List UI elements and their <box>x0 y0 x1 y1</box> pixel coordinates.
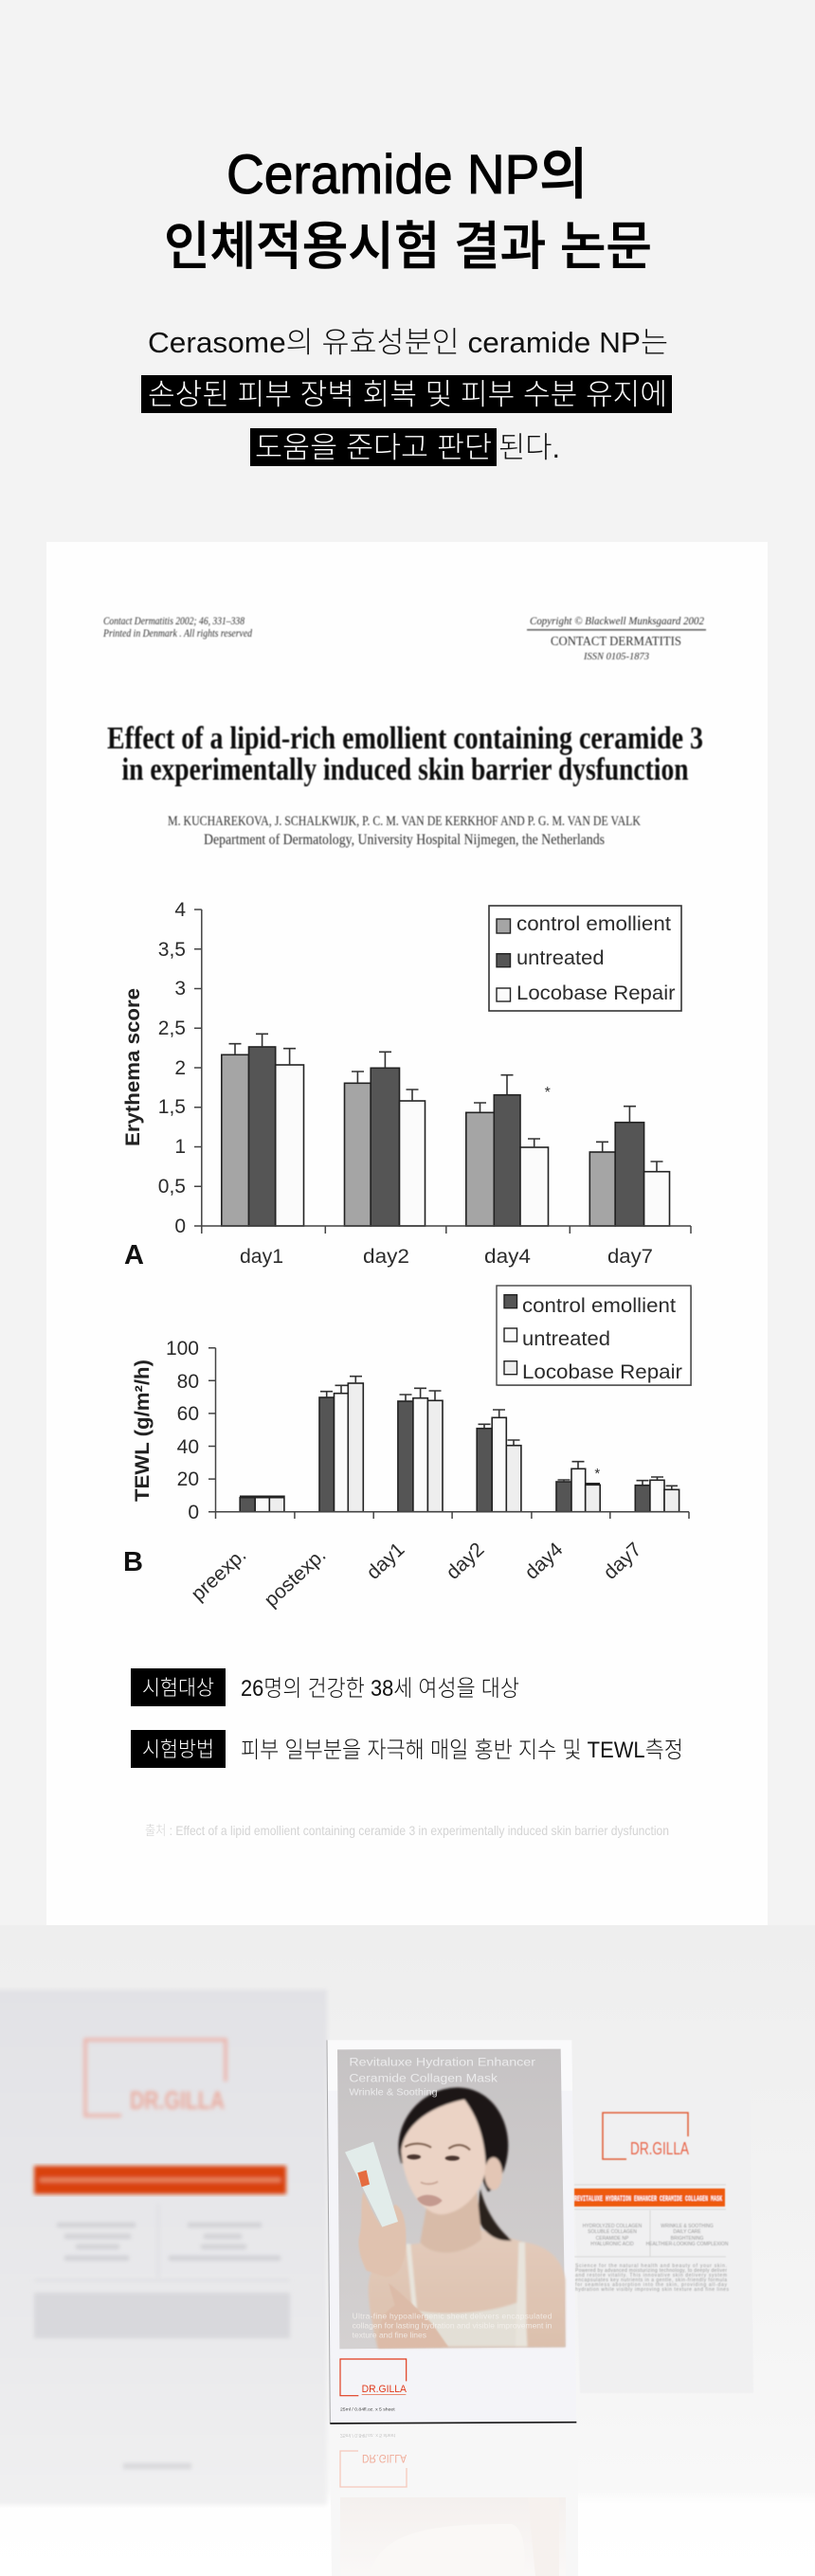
bars group day7 <box>635 1477 679 1512</box>
pack ingredients: HYALURONIC ACID <box>590 2242 634 2247</box>
bars group postexp <box>319 1377 363 1512</box>
neck <box>420 2191 481 2253</box>
bars group day2 <box>477 1410 521 1512</box>
significance star: * <box>594 1466 600 1482</box>
x axis labels: day4 <box>484 1246 531 1268</box>
blurred foreground pack <box>0 1990 327 2505</box>
x axis labels: day2 <box>363 1246 409 1268</box>
panel letter B: B <box>123 1547 143 1577</box>
pack ingredients: BRIGHTENING <box>671 2236 703 2242</box>
reflected logo <box>340 2451 407 2487</box>
study subject row: 26명의 건강한 38세 여성을 대상 <box>241 1676 519 1702</box>
pack ingredients <box>574 2185 729 2257</box>
y axis labels: 1,5 <box>158 1096 186 1118</box>
photo caption: collagen for lasting hydration and visible improvement in <box>353 2320 552 2330</box>
rotated x axis labels: preexp. <box>187 1544 250 1605</box>
y axis labels: 2 <box>174 1057 186 1079</box>
y axis labels: 80 <box>177 1371 199 1393</box>
pack ingredients: SOLUBLE COLLAGEN <box>588 2229 637 2235</box>
y axis labels: 3,5 <box>158 939 186 961</box>
box logo <box>340 2359 407 2396</box>
model photo <box>337 2049 566 2349</box>
paper header <box>102 614 706 662</box>
study method row <box>131 1730 683 1768</box>
bar chart A: erythema score <box>122 899 691 1270</box>
axes <box>208 1348 689 1519</box>
raised hand <box>358 2191 406 2277</box>
y axis labels: 60 <box>177 1403 199 1425</box>
x axis labels <box>240 1246 653 1268</box>
significance star: * <box>545 1085 551 1101</box>
paper header: Contact Dermatitis 2002; 46, 331–338 <box>103 614 244 627</box>
bars group day7 <box>589 1107 669 1226</box>
bars group preexp <box>240 1496 284 1512</box>
rotated x axis labels: day2 <box>442 1539 488 1584</box>
y axis labels: 100 <box>166 1338 199 1360</box>
box logo: DR.GILLA <box>362 2384 407 2395</box>
ponytail <box>477 2189 512 2241</box>
box reflection <box>330 2426 578 2576</box>
blurred orange band <box>34 2166 286 2194</box>
nose <box>421 2182 438 2184</box>
x axis labels: day7 <box>607 1246 653 1268</box>
intro paragraph: 도움을 준다고 판단 <box>255 431 492 464</box>
study method row: 피부 일부분을 자극해 매일 홍반 지수 및 TEWL측정 <box>241 1738 683 1763</box>
source note: 출처 : Effect of a lipid emollient containing ceramide 3 in experimentally induced skin barrier dysfunction <box>145 1823 669 1838</box>
photo caption <box>353 2311 552 2339</box>
paper title: Effect of a lipid-rich emollient containing ceramide 3 <box>107 721 703 756</box>
y axis labels: 2,5 <box>158 1018 186 1039</box>
photo headline: Wrinkle & Soothing <box>349 2088 438 2099</box>
pack description: and restore vitality. This innovative skin delivery system <box>575 2273 727 2279</box>
product photo background <box>0 1925 815 2576</box>
face <box>401 2099 486 2214</box>
orange product band <box>574 2189 725 2207</box>
y axis labels <box>158 899 186 1237</box>
pack ingredients: DAILY CARE <box>673 2229 701 2235</box>
bars group day1 <box>222 1034 303 1226</box>
pack description: Science for the natural health and beauty of your skin. <box>575 2263 727 2269</box>
page background <box>0 0 815 1925</box>
y axis labels: 4 <box>174 899 186 921</box>
rotated x axis labels: day4 <box>520 1539 568 1584</box>
legend A: untreated <box>516 947 605 969</box>
rotated x axis labels: day7 <box>599 1539 645 1584</box>
paper header: ISSN 0105-1873 <box>583 651 649 662</box>
rotated x axis labels: postexp. <box>261 1544 330 1612</box>
bars group day2 <box>345 1052 425 1226</box>
paper authors <box>168 814 641 848</box>
title <box>164 144 652 276</box>
y axis labels: 1 <box>174 1136 186 1158</box>
title: Ceramide NP의 <box>226 144 588 206</box>
pack description <box>575 2263 730 2293</box>
pack ingredients: WRINKLE & SOOTHING <box>661 2224 714 2229</box>
photo headline <box>349 2056 535 2099</box>
pack logo: DR.GILLA <box>630 2139 689 2158</box>
pack description: hydration while visibly improving skin texture and fine lines <box>575 2287 730 2293</box>
pack description: encapsulates key nutrients in a gentle, skin-friendly formula <box>575 2278 727 2283</box>
x axis labels: day1 <box>240 1246 283 1268</box>
intro paragraph: 된다. <box>498 431 560 464</box>
reflected photo <box>340 2497 566 2576</box>
hair <box>399 2087 508 2191</box>
paper header: CONTACT DERMATITIS <box>551 635 681 649</box>
pack logo <box>603 2113 689 2159</box>
y axis labels: 20 <box>177 1468 199 1490</box>
legend B: Locobase Repair <box>522 1361 682 1383</box>
blurred pack logo: DR.GILLA <box>130 2086 225 2115</box>
paper authors: M. KUCHAREKOVA, J. SCHALKWIJK, P. C. M. VAN DE KERKHOF AND P. G. M. VAN DE VALK <box>168 814 641 829</box>
axes <box>194 910 691 1234</box>
intro paragraph <box>141 326 672 466</box>
panel letter A: A <box>124 1240 144 1270</box>
pack description: Powered by advanced moisturizing technology, to deeply deliver <box>575 2268 727 2274</box>
box volume text: 25ml / 0.84fl.oz. x 5 sheet <box>340 2406 395 2412</box>
lower hand <box>378 2283 448 2349</box>
ear <box>484 2157 502 2190</box>
paper header: Copyright © Blackwell Munksgaard 2002 <box>530 614 704 627</box>
bars group day1 <box>398 1388 443 1512</box>
lips <box>417 2195 443 2207</box>
box body <box>327 2040 576 2423</box>
intro paragraph: 손상된 피부 장벽 회복 및 피부 수분 유지에 <box>148 378 667 411</box>
eyebrows <box>405 2144 470 2150</box>
paper authors: Department of Dermatology, University Hospital Nijmegen, the Netherlands <box>204 832 605 848</box>
pack ingredients: HEALTHIER-LOOKING COMPLEXION <box>646 2242 729 2247</box>
photo headline: Revitaluxe Hydration Enhancer <box>349 2056 535 2069</box>
legend B: control emollient <box>522 1295 676 1317</box>
pack description: for seamless absorption into the skin, providing all-day <box>575 2282 728 2288</box>
reflected logo: DR.GILLA <box>362 2452 407 2463</box>
y axis labels: 0,5 <box>158 1176 186 1198</box>
bar chart B: TEWL <box>123 1286 692 1612</box>
photo caption: Ultra-fine hypoallergenic sheet delivers encapsulated <box>353 2311 552 2320</box>
torso <box>369 2229 566 2348</box>
rotated x axis labels <box>187 1539 645 1612</box>
reflected volume text: 25ml / 0.84fl.oz. x 5 sheet <box>340 2432 396 2438</box>
photo caption: texture and fine lines <box>353 2330 426 2339</box>
study subject row: 시험대상 <box>142 1676 214 1700</box>
intro paragraph: Cerasome의 유효성분인 ceramide NP는 <box>148 326 668 359</box>
legend A <box>489 906 681 1011</box>
blurred pack copy <box>34 2204 290 2469</box>
y axis labels <box>166 1338 199 1523</box>
study subject row <box>131 1668 519 1706</box>
center product box <box>327 2040 576 2423</box>
paper header: Printed in Denmark . All rights reserved <box>102 626 253 639</box>
eyes <box>407 2154 421 2159</box>
bars group day4 <box>556 1462 600 1512</box>
y axis labels: 0 <box>188 1502 199 1523</box>
photo headline: Ceramide Collagen Mask <box>349 2071 498 2084</box>
y axis labels: 40 <box>177 1436 199 1458</box>
study method row: 시험방법 <box>142 1738 214 1761</box>
title: 인체적용시험 결과 논문 <box>164 217 652 276</box>
right sheet pack <box>572 2080 753 2393</box>
legend B <box>497 1286 692 1386</box>
panel: paper card <box>46 542 768 1925</box>
paper title: in experimentally induced skin barrier dysfunction <box>121 752 689 787</box>
y axis labels: 0 <box>174 1216 186 1237</box>
legend A: control emollient <box>516 913 671 935</box>
paper title <box>107 721 703 787</box>
pack ingredients: HYDROLYZED COLLAGEN <box>583 2224 643 2229</box>
pack ingredients: CERAMIDE NP <box>596 2236 629 2242</box>
legend B: untreated <box>522 1328 610 1350</box>
orange product band: REVITALUXE HYDRATION ENHANCER CERAMIDE COLLAGEN MASK <box>574 2195 722 2204</box>
tube <box>345 2142 398 2227</box>
rotated x axis labels: day1 <box>362 1539 408 1584</box>
y axis labels: 3 <box>174 978 186 1000</box>
blurred pack logo <box>85 2040 226 2116</box>
legend A: Locobase Repair <box>516 982 675 1004</box>
y axis title: TEWL (g/m²/h) <box>132 1360 154 1502</box>
bars group day4 <box>466 1075 548 1226</box>
y axis title: Erythema score <box>122 988 144 1146</box>
